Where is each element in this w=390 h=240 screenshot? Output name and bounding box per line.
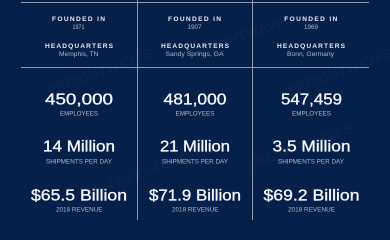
column: DHL: Bonn, Germany xyxy=(287,51,335,58)
column: FedEx: 2018 REVENUE xyxy=(56,206,102,213)
column: FedEx: EMPLOYEES xyxy=(60,111,98,118)
column: DHL: 1969 xyxy=(304,24,318,31)
column: FedEx: Memphis, TN xyxy=(59,51,99,58)
comparison table: FREIGHTWAVES xyxy=(186,10,295,63)
column: DHL: HEADQUARTERS xyxy=(277,43,346,50)
column: FedEx xyxy=(31,16,127,213)
column: DHL: FOUNDED IN xyxy=(284,16,338,23)
column: UPS: SHIPMENTS PER DAY xyxy=(162,158,229,165)
column: FedEx: FOUNDED IN xyxy=(52,16,105,23)
column: UPS: 1907 xyxy=(188,24,202,31)
column: UPS: $71.9 Billion xyxy=(149,187,241,204)
column: FedEx: 1971 xyxy=(72,24,85,31)
column: FedEx: HEADQUARTERS xyxy=(45,43,114,50)
column: DHL: SHIPMENTS PER DAY xyxy=(278,158,345,165)
comparison table: FREIGHTWAVES xyxy=(106,140,215,193)
column: DHL: 547,459 xyxy=(281,92,342,108)
column: UPS: 481,000 xyxy=(164,92,227,108)
column: FedEx: SHIPMENTS PER DAY xyxy=(46,158,113,165)
column: DHL: 2018 REVENUE xyxy=(288,206,335,213)
column: DHL: 3.5 Million xyxy=(272,139,350,156)
column: DHL: $69.2 Billion xyxy=(264,187,360,204)
column: DHL xyxy=(264,16,360,213)
column: DHL: EMPLOYEES xyxy=(292,111,331,118)
column: UPS: 21 Million xyxy=(160,139,230,156)
column: UPS xyxy=(149,16,241,213)
column: UPS: 2018 REVENUE xyxy=(172,206,218,213)
column: FedEx: $65.5 Billion xyxy=(31,187,127,204)
column: FedEx: 450,000 xyxy=(45,92,113,108)
column: UPS: EMPLOYEES xyxy=(176,111,214,118)
column: UPS: Sandy Springs, GA xyxy=(166,51,224,58)
column: FedEx: 14 Million xyxy=(43,139,115,156)
comparison table: FREIGHTWAVES xyxy=(46,45,155,98)
column: UPS: HEADQUARTERS xyxy=(161,43,230,50)
comparison table: FREIGHTWAVES xyxy=(246,120,355,173)
column: UPS: FOUNDED IN xyxy=(168,16,221,23)
